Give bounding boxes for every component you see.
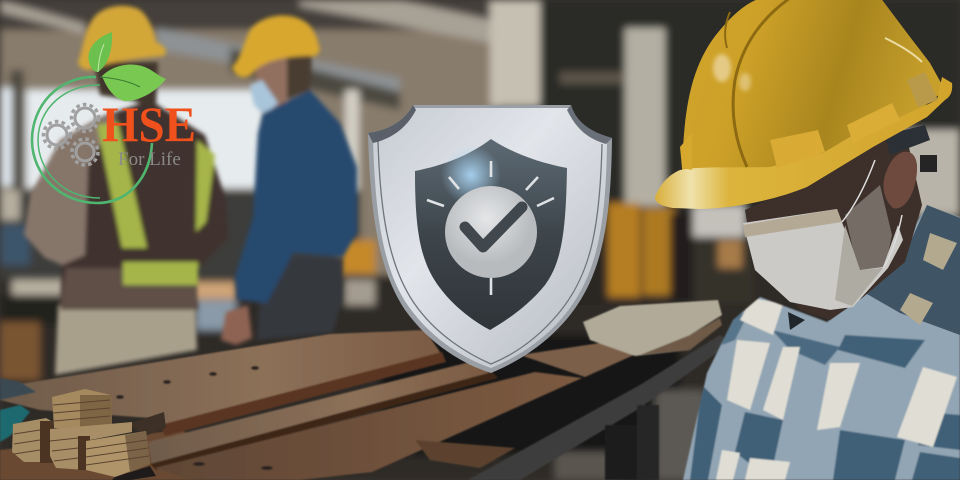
- central shield with checkmark: [368, 105, 612, 373]
- logo ring: [32, 77, 152, 203]
- rays: [427, 161, 554, 295]
- shield outer plate: [368, 105, 612, 373]
- plank 1: [0, 330, 442, 425]
- dark metal frame: [468, 335, 732, 480]
- high-vis stripes: [97, 122, 215, 285]
- ear: [883, 152, 917, 208]
- worker in blue shirt (background): [221, 15, 357, 345]
- plank 3: [155, 372, 582, 480]
- logo tagline: For Life: [118, 149, 181, 170]
- notebook and teal object: [0, 378, 36, 442]
- shirt collar: [860, 205, 960, 335]
- logo: HSE For Life: [32, 32, 196, 203]
- foreground worker with helmet and mask: [655, 0, 960, 480]
- worker in high-vis vest (background): [24, 6, 228, 375]
- stacked boards: [583, 300, 722, 356]
- shirt: [683, 207, 960, 480]
- plank 2: [148, 362, 492, 466]
- logo wordmark: HSE: [102, 96, 196, 152]
- neck and face: [745, 130, 922, 320]
- workbench planks: [0, 300, 732, 480]
- hard hat: [655, 0, 952, 209]
- check mark: [465, 207, 522, 247]
- icon: green leaves: [88, 32, 166, 101]
- check disc: [445, 186, 537, 278]
- stacked wooden blocks: [12, 389, 166, 480]
- helmet: [78, 6, 166, 70]
- inner dark shield: [415, 139, 567, 330]
- icon: gears: [44, 104, 98, 165]
- face mask: [743, 160, 903, 310]
